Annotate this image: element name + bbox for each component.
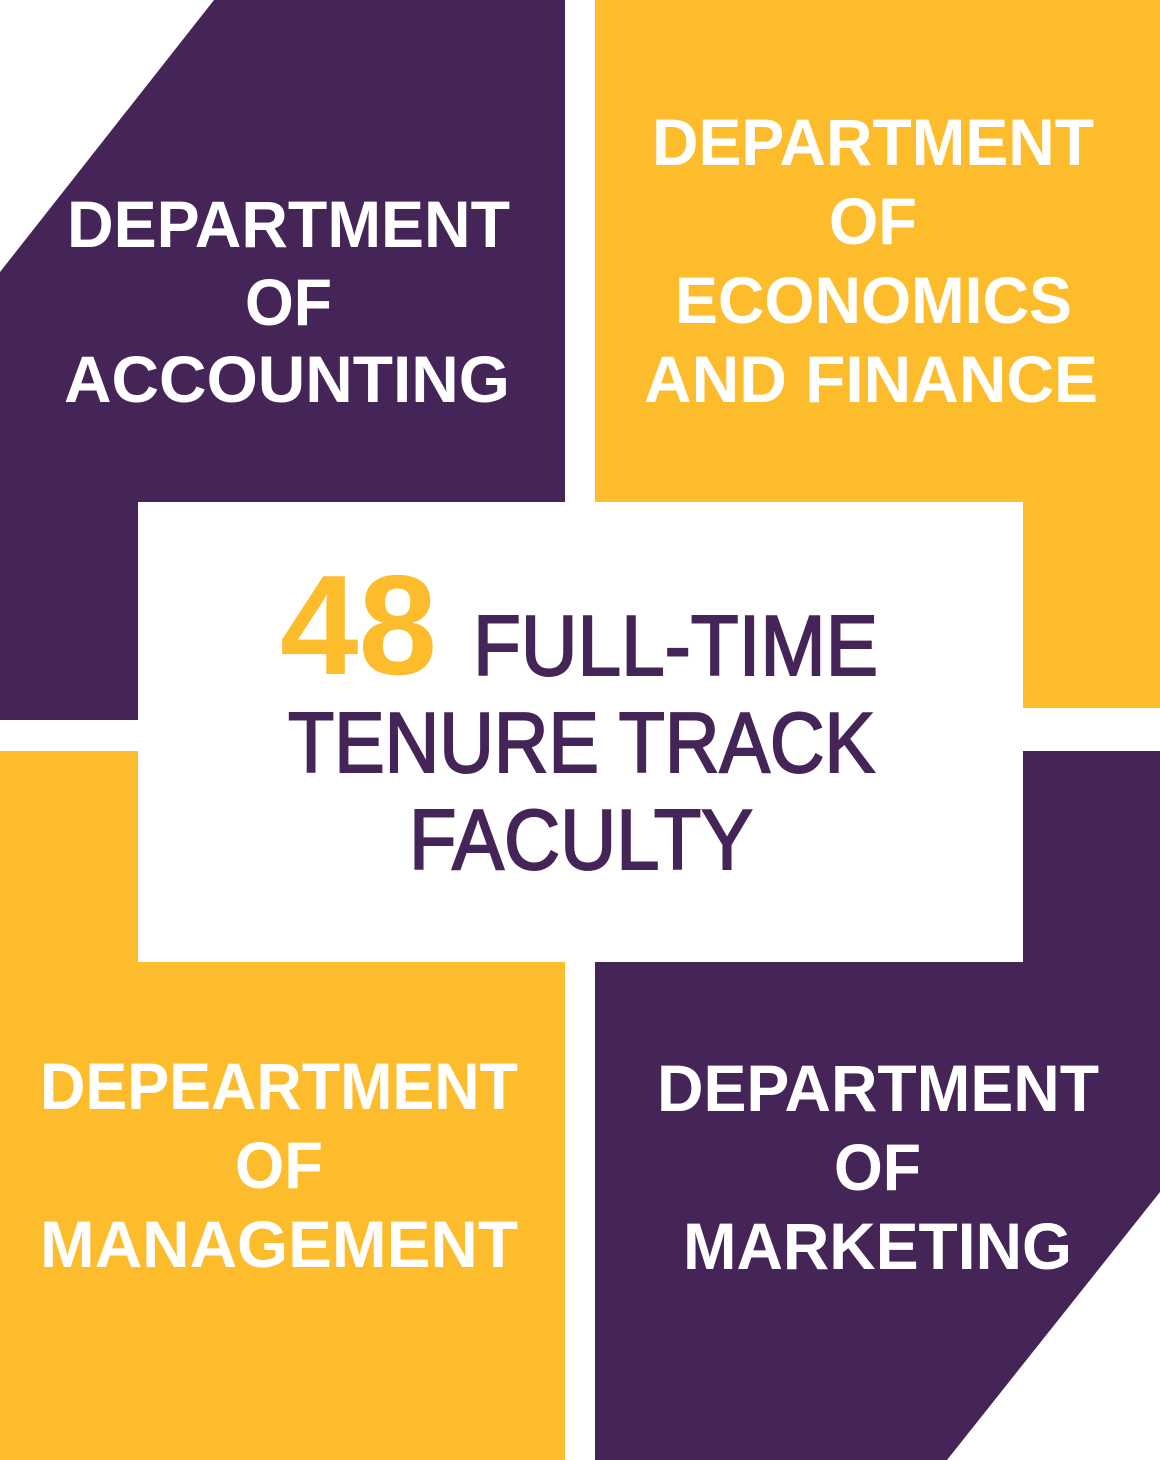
panel: department of management <box>0 751 565 1460</box>
panel: department of economics and finance <box>595 0 1160 708</box>
heading: department of economics and finance: DEPARTMENT <box>652 105 1094 179</box>
heading: department of management <box>40 1049 518 1281</box>
callout text <box>288 599 878 888</box>
heading: department of management: MANAGEMENT <box>40 1207 518 1281</box>
callout text: FACULTY <box>409 793 753 888</box>
heading: department of economics and finance: AND FINANCE <box>644 342 1098 416</box>
number: 48: 48 <box>280 546 437 705</box>
heading: department of marketing <box>657 1051 1099 1283</box>
heading: department of accounting <box>64 187 510 416</box>
heading: department of marketing: DEPARTMENT <box>657 1051 1099 1125</box>
heading: department of accounting: ACCOUNTING <box>64 342 510 416</box>
callout text: FULL-TIME <box>473 599 878 694</box>
heading: department of accounting: OF <box>245 265 332 339</box>
heading: department of economics and finance: ECONOMICS <box>675 263 1072 337</box>
panel: department of marketing <box>595 751 1160 1460</box>
heading: department of management: DEPEARTMENT <box>40 1049 518 1123</box>
heading: department of marketing: MARKETING <box>683 1209 1072 1283</box>
heading: department of management: OF <box>235 1128 323 1202</box>
heading: department of economics and finance <box>644 105 1098 416</box>
heading: department of marketing: OF <box>834 1130 921 1204</box>
panel: department of accounting <box>0 0 565 720</box>
heading: department of accounting: DEPARTMENT <box>67 187 510 261</box>
center callout: 48 full-time tenure track faculty <box>138 502 1023 962</box>
heading: department of economics and finance: OF <box>829 184 917 258</box>
callout text: TENURE TRACK <box>288 696 875 791</box>
